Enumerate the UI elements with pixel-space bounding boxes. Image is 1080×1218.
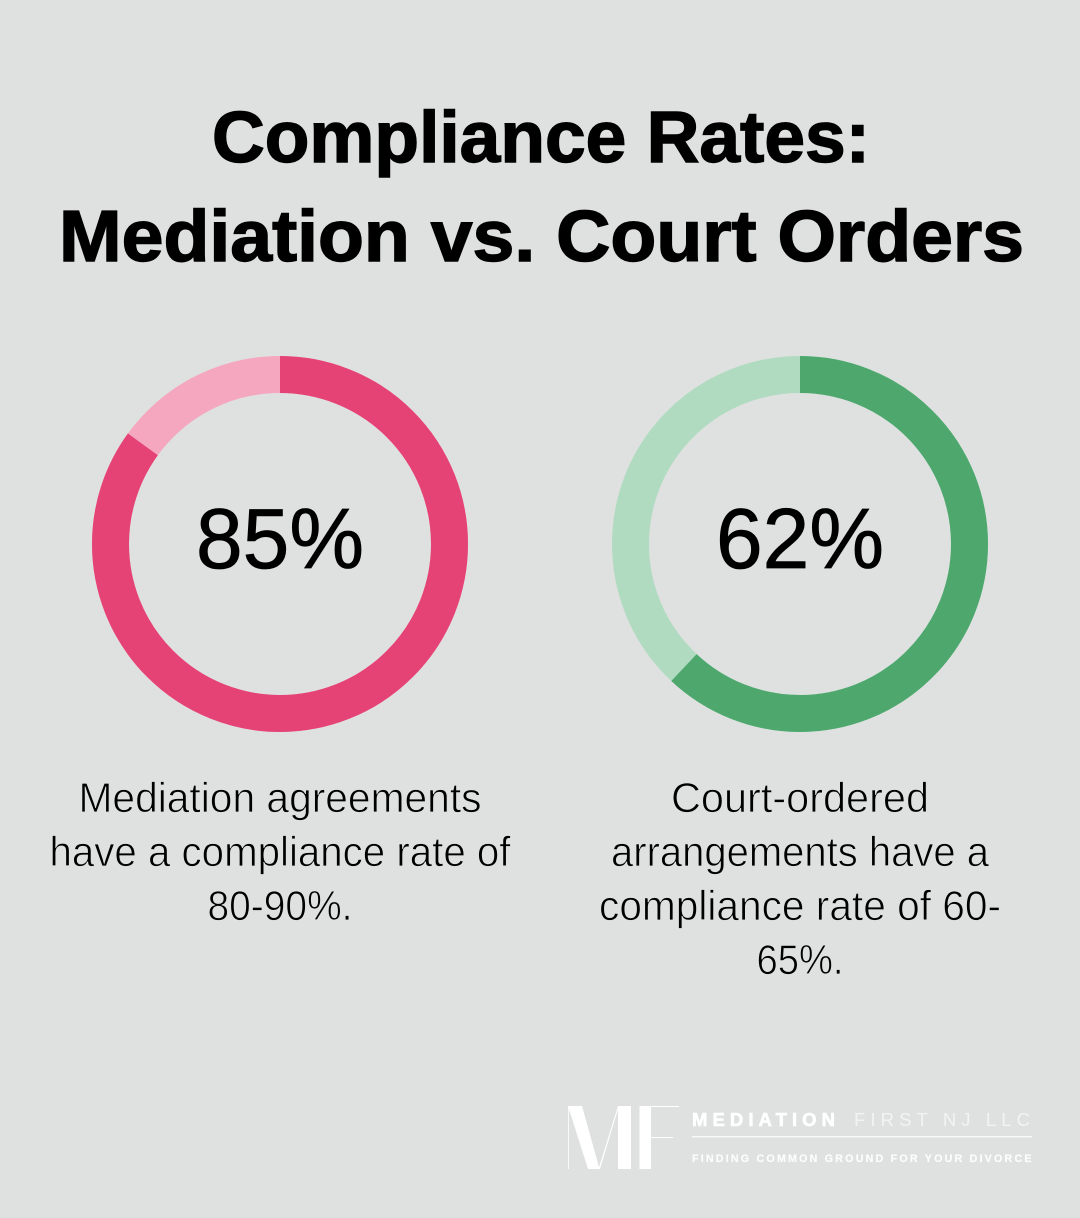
donut chart: 85% — [110, 374, 450, 714]
description: court orders: compliance rate of 60- — [599, 882, 1001, 929]
description: court orders: arrangements have a — [611, 828, 990, 875]
panel: mediation — [50, 374, 511, 929]
description: mediation — [50, 774, 511, 929]
panel: court orders — [599, 374, 1001, 983]
title: Compliance Rates: — [212, 98, 870, 178]
logo name: MEDIATION — [692, 1109, 835, 1130]
donut chart: 62% — [630, 374, 970, 714]
description: court orders: Court-ordered — [671, 774, 929, 821]
logo: FIRST NJ LLC — [854, 1109, 1030, 1130]
description: court orders: 65%. — [756, 936, 844, 983]
logo tagline: FINDING COMMON GROUND FOR YOUR DIVORCE — [692, 1153, 1032, 1165]
logo mark: MF — [568, 1106, 679, 1169]
description: mediation: 80-90%. — [208, 882, 352, 929]
description: court orders — [599, 774, 1001, 983]
logo — [568, 1106, 1032, 1169]
title — [59, 98, 1024, 277]
description: mediation: Mediation agreements — [78, 774, 482, 821]
value: 85%: 85% — [196, 492, 364, 587]
value: 62%: 62% — [716, 492, 884, 587]
title: Mediation vs. Court Orders — [59, 197, 1024, 277]
description: mediation: have a compliance rate of — [50, 828, 511, 875]
